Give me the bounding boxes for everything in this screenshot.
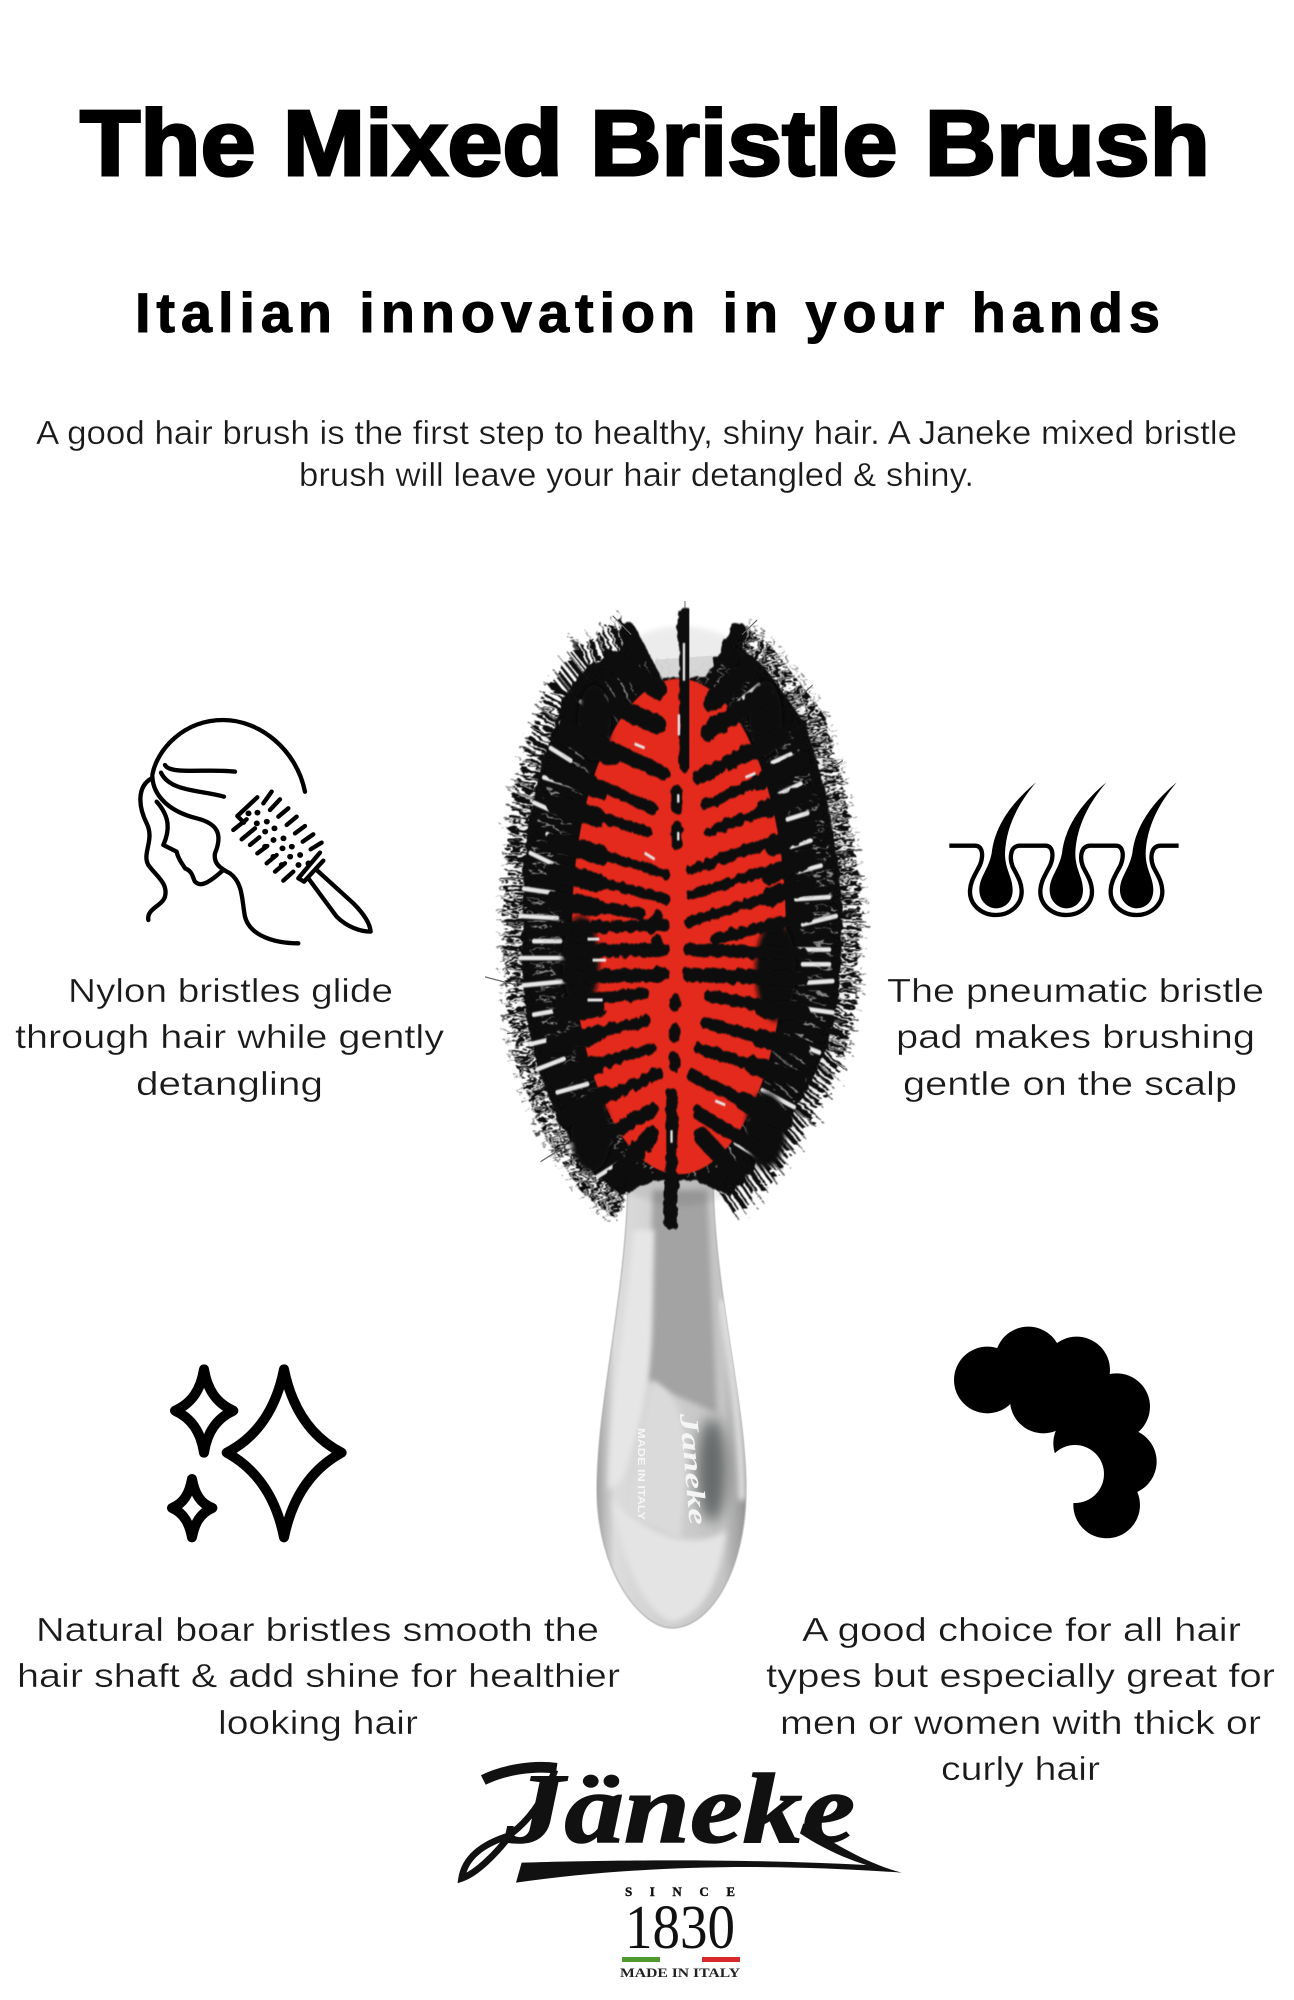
intro paragraph: A good hair brush is the first step to healthy, shiny hair. A Janeke mixed bristle xyxy=(36,414,1237,451)
Janeke logo xyxy=(462,1753,902,1980)
feature 3 text: Natural boar bristles smooth the xyxy=(36,1611,599,1648)
right bristle tufts xyxy=(688,668,809,1176)
title: The Mixed Bristle Brush xyxy=(80,91,1210,195)
icon: hair follicles xyxy=(949,782,1179,915)
white specks in centre xyxy=(588,643,756,1143)
feature 4: hair types xyxy=(766,1327,1275,1787)
feature 2 text: The pneumatic bristle xyxy=(887,972,1264,1009)
feature 4 text: types but especially great for xyxy=(766,1657,1275,1694)
logo swoosh and J flourish xyxy=(462,1767,902,1883)
logo wordmark: Jäneke xyxy=(504,1753,855,1864)
icon: sparkles xyxy=(172,1369,342,1537)
feature 2 text: gentle on the scalp xyxy=(903,1065,1237,1102)
feature 1 text: Nylon bristles glide xyxy=(68,972,393,1009)
mottled bristle texture xyxy=(539,668,824,1164)
feature 4 text xyxy=(766,1611,1275,1787)
year 1830: 1830 xyxy=(625,1894,735,1962)
feature 2 text xyxy=(887,972,1264,1102)
feature 4 text: men or women with thick or xyxy=(780,1704,1261,1741)
brush photo illustration xyxy=(485,601,865,1628)
feature 1 text: detangling xyxy=(136,1065,323,1102)
left bristle tufts xyxy=(554,660,666,1176)
bristle fringe xyxy=(515,635,850,1206)
centre bristle column xyxy=(651,620,686,1223)
handle engraving: Janeke: Janeke xyxy=(674,1411,713,1526)
feature 4 text: curly hair xyxy=(941,1750,1100,1787)
feature 3 text xyxy=(17,1611,620,1741)
feature 1 text xyxy=(15,972,445,1102)
icon: curly hair xyxy=(954,1327,1157,1538)
icon: woman brushing hair xyxy=(140,720,371,943)
bristle head xyxy=(485,601,865,1223)
top grey base xyxy=(655,656,715,689)
feature 2 text: pad makes brushing xyxy=(896,1018,1255,1055)
white gaps between bristles xyxy=(520,685,836,1176)
feature 2: pneumatic pad xyxy=(887,782,1264,1102)
italian flag bars xyxy=(622,1957,740,1962)
subtitle: Italian innovation in your hands xyxy=(135,281,1160,344)
soft shadow xyxy=(510,626,853,1206)
brush handle xyxy=(597,1170,746,1628)
intro paragraph: brush will leave your hair detangled & shiny. xyxy=(299,456,974,493)
feature 3 text: hair shaft & add shine for healthier xyxy=(17,1657,620,1694)
since label: SINCE xyxy=(625,1884,735,1899)
red pneumatic pad xyxy=(572,679,786,1174)
dark side blotches xyxy=(562,681,796,1172)
feature 4 text: A good choice for all hair xyxy=(802,1611,1241,1648)
feature 3 text: looking hair xyxy=(218,1704,418,1741)
handle engraving: made in Italy: MADE IN ITALY xyxy=(635,1428,646,1520)
bristle mass xyxy=(515,632,850,1220)
feature 3: boar bristles xyxy=(17,1369,620,1741)
feature 1 text: through hair while gently xyxy=(15,1018,445,1055)
fine stray hairs xyxy=(485,601,865,1162)
intro paragraph xyxy=(36,414,1237,493)
made in italy label: MADE IN ITALY xyxy=(620,1965,741,1980)
feature 1: nylon bristles xyxy=(15,720,445,1102)
